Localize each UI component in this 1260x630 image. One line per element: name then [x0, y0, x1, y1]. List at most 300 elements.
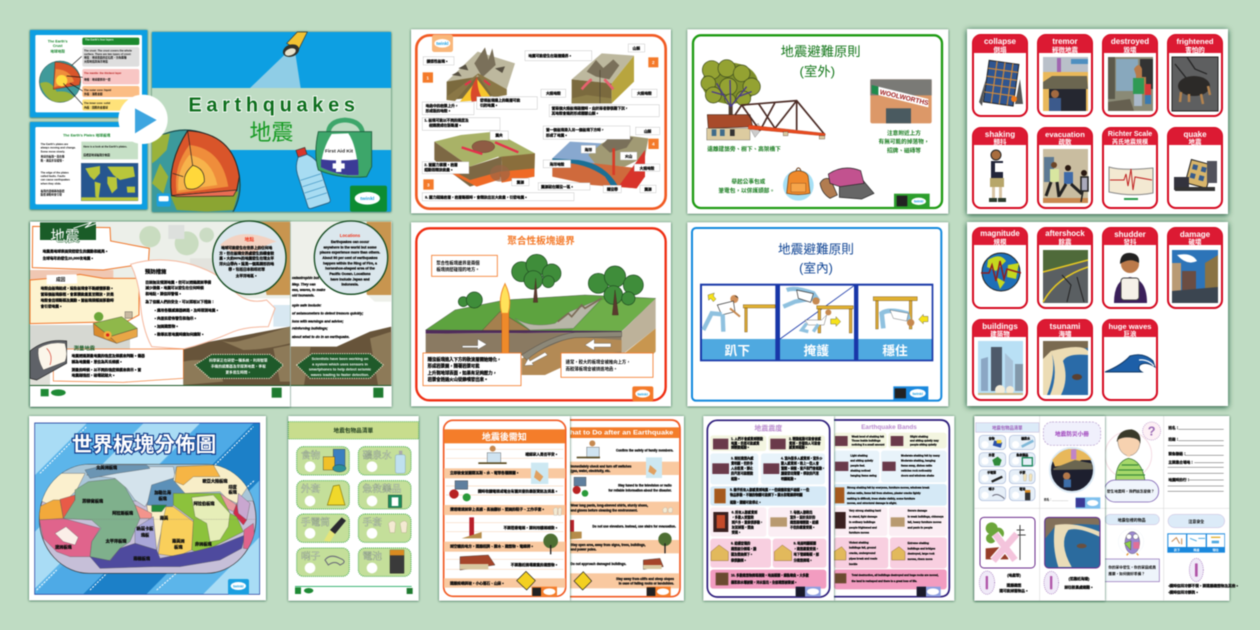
- page: English: moves, rivers move: [908, 557, 933, 561]
- diagram 3: transform fault: [434, 132, 535, 187]
- intensity text: 地下管線斷裂，部: [794, 552, 820, 557]
- title: Chinese: 地震: [249, 120, 293, 145]
- icon: torch: [324, 517, 346, 542]
- preparation text: • 加固建築物。: [155, 324, 179, 329]
- page: English: Weak level of shaking felt: [852, 434, 884, 438]
- list text: 立即檢查並關閉瓦斯、水、電等各種開關。: [450, 470, 519, 475]
- intensity text: 覺到，坐著的人可能會: [789, 440, 821, 445]
- mini panel: indoor rules: [1167, 533, 1225, 553]
- circle: locations: Earthquakes can occur: [331, 240, 370, 244]
- card: Richter scale: 芮氏地震規模: [1112, 138, 1148, 146]
- slide: the Earth's plates: Some move slowly.: [41, 149, 65, 153]
- icon: earth block: [93, 312, 137, 343]
- label boxes: 火山: [625, 154, 633, 159]
- diagram 1: divergent boundary: [447, 47, 515, 102]
- page: English: fall, heavy furniture moves: [908, 520, 942, 524]
- cover title: 地震防災小冊: [1055, 430, 1089, 438]
- label boxes: 地震可能發生在碰撞邊界。: [528, 53, 572, 58]
- heading band: 地震包物品清單: [992, 424, 1023, 431]
- label boxes: 大陸地殼: [640, 165, 655, 170]
- card: buildings: buildings: [982, 322, 1018, 331]
- map labels: 板塊: [159, 495, 168, 501]
- map labels: 塊板: [141, 532, 150, 538]
- intensity text: 感覺到搖動。: [789, 445, 808, 450]
- slide: the Earth's plates: [30, 122, 147, 209]
- map labels: 加勒比海: [154, 489, 172, 495]
- page: English: Slight shaking: [910, 434, 929, 438]
- label boxes: 發現板塊邊上的斷層可能: [480, 98, 521, 103]
- slide: the Earth's crust: The inner core: solid: [84, 101, 111, 105]
- preparation text: • 向居民發佈警告和指示。: [155, 316, 197, 321]
- page: English: Extreme shaking: [908, 541, 929, 545]
- intensity text: 建築部分倒塌，牆: [731, 546, 757, 551]
- page: English: May. They can: [292, 283, 316, 287]
- map labels: 板塊: [174, 544, 183, 550]
- icon: world map: [81, 163, 138, 201]
- intensity text: 的汽車可能輕微: [731, 470, 754, 475]
- callout: subduction: 通常，較大的板塊會被推向上方，: [566, 359, 631, 366]
- circle: locations: have include Japan and: [330, 277, 370, 281]
- page: English: smartphones to help detect seismic: [309, 368, 371, 372]
- circle: locations: [314, 221, 388, 294]
- page: English: for reliable information about the disaster.: [609, 489, 672, 493]
- label boxes: 形成了地震。: [546, 133, 568, 138]
- slide: the Earth's crust: 地球地殼: [50, 48, 65, 53]
- logo: twinkl: twinkl: [360, 196, 375, 202]
- page: English: of seismometers to detect tremors quickly;: [292, 311, 363, 315]
- card: collapse: collapse: [984, 37, 1017, 46]
- seismograph block: 地震越強烈，破壞就越大。: [72, 372, 116, 377]
- list text: 確認家人是否平安。: [525, 452, 558, 457]
- label boxes: 2. 當壓力累積，岩層: [424, 162, 458, 167]
- label boxes: 海洋地殼: [550, 161, 565, 166]
- preparation text: 減少損傷，地震可以發生在任何時候: [145, 285, 204, 290]
- intensity text: [730, 436, 825, 584]
- panel: earthquake prevention booklet: [974, 416, 1239, 601]
- causes block: 當兩個板塊摩擦，會累積能量直至釋放，於是: [41, 292, 114, 297]
- page: English: dishes rattle, items fall from shelves, plaster cracks lightly: [847, 491, 921, 495]
- slide: the Earth's plates: Here is a look at the Earth's plates.: [83, 144, 127, 148]
- number tags: 2: [652, 60, 655, 65]
- callout: magma: 形成岩漿團，隨著岩漿可能: [428, 363, 480, 370]
- icons: intensity: [711, 439, 792, 585]
- slide: the Earth's crust: surface. There are two types of crust:: [84, 52, 131, 56]
- card: Richter scale: Richter Scale: [1108, 131, 1152, 138]
- hexagon note: 科學家正在研發一種系統，利用智慧: [209, 358, 268, 363]
- logo: footer: [796, 587, 821, 597]
- page: English: doors and windows shake: [901, 474, 935, 478]
- mini panel: indoor rules: 穩住: [1213, 547, 1219, 552]
- hexagon note: [195, 354, 283, 378]
- form labels: 主要集合場地：: [1168, 460, 1194, 465]
- intensity text: 搖動。: [731, 476, 740, 481]
- page: left sheet: [974, 416, 1105, 601]
- page: English: Do not use elevators. Instead, use stairs for evacuation.: [592, 525, 676, 529]
- page: English: reinforcing buildings;: [292, 327, 328, 331]
- page: English: people frightened and: [849, 526, 877, 530]
- intensity text: 搖動，擺鐘可能停止。: [730, 499, 762, 504]
- checklist: 急救藥品: [1016, 452, 1028, 457]
- slide: the Earth's crust: 大陸地殼與海洋地殼: [84, 59, 108, 63]
- heading pill: [1105, 514, 1159, 525]
- card: Richter scale: [1103, 128, 1157, 208]
- page: English: catastrophic but: [292, 276, 320, 280]
- callout: magma: 上升到地球表面，如果有足夠壓力，: [428, 369, 497, 376]
- heading band: [976, 423, 1039, 432]
- list text: [450, 452, 558, 586]
- mini panel: indoor rules: 趴下: [1174, 547, 1180, 552]
- diagram 2: continental collision: [572, 53, 634, 103]
- step: cover: 掩護: [804, 343, 829, 358]
- caption: right: 前往較高處避難。: [1064, 585, 1094, 590]
- slide: the Earth's plates: when they slide.: [41, 181, 61, 185]
- page: English: in weak buildings, chimneys: [908, 514, 944, 518]
- slide: the Earth's plates: The Earth's Plates 地球板塊: [63, 132, 111, 137]
- circle: locations: happen within the Ring of Fire, a: [323, 261, 377, 265]
- icon: person taking cover: [820, 168, 874, 199]
- photo: shop sign: WOOLWORTHS: [879, 89, 930, 107]
- header block: 地震: [50, 228, 80, 245]
- subtitle: (室外): [800, 63, 835, 79]
- label boxes: 山脈: [633, 46, 640, 51]
- icon: magma plume: [500, 284, 510, 355]
- intensity text: 4. 室內很多人感覺到，室外少: [781, 455, 823, 460]
- safety note: [1168, 583, 1239, 595]
- callout: boundary definition: 板塊擠壓碰撞的地方。: [436, 266, 480, 273]
- list text: 不要靠近損壞嚴重的建築物。: [511, 562, 558, 567]
- logo: twinkl: twinkl: [233, 585, 244, 589]
- card: aftershock: 餘震: [1058, 237, 1072, 246]
- heading pill: drop cover hold: 注意安全: [1188, 518, 1204, 524]
- label boxes: 海洋: [585, 147, 592, 152]
- background: hillside town: [30, 222, 290, 385]
- page: right sheet: [1104, 416, 1239, 601]
- label boxes: 大陸地殼: [546, 91, 561, 96]
- page: English: in case of falling rocks or landslides.: [619, 582, 674, 586]
- slide: the Earth's plates: 這裡是地球板塊分佈圖: [83, 153, 110, 157]
- label boxes: 其地殼會隆起形成褶皺山脈。: [552, 110, 599, 115]
- page: English: Severe damage: [908, 509, 928, 513]
- circle: locations: places experience more than others.: [320, 251, 380, 255]
- icon: damaged house: [707, 115, 761, 140]
- hexagon note: 手機的感應器及早探測地震，爭取: [211, 364, 266, 369]
- seismograph block: 地震透過測量地震的強度及規模來判斷。儀器: [72, 353, 145, 358]
- page: English: [834, 416, 954, 601]
- preparation text: • 應用各種感應器網路，及時探測地震。: [155, 308, 219, 313]
- card: tsunami: 海嘯: [1058, 329, 1072, 338]
- step: drop: [702, 286, 775, 360]
- map labels: 歐亞大陸板塊: [203, 478, 228, 484]
- logo: twinkl: [894, 194, 930, 208]
- step: cover: [780, 286, 854, 360]
- list text: 清理環境前穿上長褲、長袖襯衫、堅固的鞋子、工作手套。: [450, 507, 545, 512]
- heading pill: 地震包裡的物品: [1118, 516, 1146, 522]
- map labels: 納茲卡板: [137, 525, 154, 531]
- icon: first aid bag: [388, 495, 402, 508]
- poster: world plates: [29, 416, 266, 600]
- causes block: 地殼由板塊組成，這些板塊會不斷緩慢移動。: [41, 286, 114, 291]
- map labels: 南美洲: [172, 538, 185, 544]
- icon: owl: [1118, 529, 1144, 555]
- callout: boundary definition: 聚合性板塊邊界是兩個: [436, 259, 480, 266]
- page: English: eas, waves, to make: [292, 288, 325, 292]
- intensity text: 5. 幾乎所有人都感覺到地震，一些碗盤和窗戶破裂，一些: [730, 487, 810, 492]
- page: English: pipes break and roads: [849, 556, 878, 560]
- card: damage: 破壞: [1188, 237, 1202, 246]
- slide: the Earth's crust: The Earth's: [48, 39, 68, 43]
- caption: falling objects: 有無可能的掉落物，: [879, 138, 929, 146]
- intensity text: ，多數人受驚跑: [732, 514, 755, 519]
- panel: plate boundaries diagrams: [411, 29, 671, 213]
- map labels: 南極板塊: [133, 555, 151, 561]
- icon: bridge: [735, 101, 825, 139]
- logo: footer: [373, 388, 383, 398]
- step: drop: 趴下: [725, 344, 750, 358]
- header block: [32, 222, 149, 270]
- page: English: ions with warnings and advice;: [292, 319, 344, 323]
- cover title: [1043, 422, 1101, 445]
- page: English: Violent shaking: [849, 540, 869, 544]
- checklist items: 電池: [363, 551, 382, 563]
- card: collapse: 倒塌: [994, 45, 1007, 54]
- card: tsunami: tsunami: [1050, 322, 1080, 331]
- panel: vocabulary cards part 1: [967, 29, 1228, 214]
- card: aftershock: [1038, 228, 1092, 308]
- page: English: to stand, light damage: [849, 514, 878, 518]
- earth band: [183, 327, 290, 385]
- preparation text: 為了保護人們的安全，可以採取以下措施：: [145, 299, 215, 304]
- intensity text: 明顯搖動。: [781, 476, 797, 481]
- slide: the Earth's crust: The outer core: liquid: [84, 88, 112, 92]
- callout: subduction: [561, 353, 653, 377]
- intensity text: ，建築嚴重受損，: [794, 546, 819, 551]
- checklist: 外套: [989, 452, 995, 457]
- card: magnitude: 規模: [994, 237, 1007, 246]
- callout: magma: 隱沒板塊進入下方的軟流層開始熔化，: [428, 356, 501, 363]
- map labels: [55, 464, 238, 561]
- slide: the Earth's crust: 地幔：地球最厚的一層: [84, 78, 111, 82]
- intensity text: 6. 所有人都感覺到: [732, 509, 757, 514]
- card: huge waves: [1103, 320, 1157, 400]
- circle: locations: Indonesia.: [341, 283, 359, 287]
- speech bubble: 發生地震時，我們該怎麼做？: [1107, 488, 1154, 493]
- panel: outdoor earthquake safety: [687, 29, 948, 214]
- icon: thinking child: [1105, 422, 1161, 481]
- page: English: Confirm the safety of family members.: [616, 449, 673, 453]
- image: tsunami: [1045, 517, 1100, 568]
- page: English: Wear long pants, long-sleeved shirts, sturdy shoes,: [571, 504, 648, 508]
- title: Earthquakes: [188, 95, 355, 117]
- intensity text: 物品移動，不穩的物體可能倒下。樹木和電線桿明顯: [730, 492, 803, 497]
- icon: gloves: [388, 521, 407, 533]
- card: shaking: 顫抖: [994, 137, 1007, 146]
- map labels: 板塊: [229, 488, 238, 494]
- checklist: 手電筒: [987, 469, 996, 474]
- circle: earthquake locations: 洋火山帶內。這是一個馬蹄形的地: [219, 261, 274, 266]
- map labels: 北美洲板塊: [96, 464, 118, 470]
- icon: earth layers: [39, 56, 83, 105]
- intensity text: 建築損壞輕微，結構: [790, 519, 819, 524]
- icon: food tins: [323, 449, 346, 472]
- title: 地震避難原則: [778, 243, 854, 257]
- intensity text: 2. 輕微搖動可能會被感: [789, 436, 822, 441]
- page: English: vehicles rock noticeably: [901, 469, 932, 473]
- intensity text: 灰泥掉落，煙囪: [732, 524, 754, 529]
- checklist items: 手電筒: [301, 517, 330, 529]
- page: English: items sway, dishes rattle: [901, 464, 933, 468]
- checklist: 電池: [1019, 486, 1025, 491]
- panel strip frame: [700, 284, 933, 361]
- page: English: buildings and bridges: [908, 546, 936, 550]
- title: 地震震度: [754, 424, 782, 433]
- intensity text: 3. 附近建築內感: [731, 455, 754, 460]
- card: destroyed: 毀壞: [1124, 45, 1137, 54]
- card: shaking: shaking: [985, 130, 1015, 139]
- caption: left: [999, 573, 1029, 593]
- icon: tree: [701, 60, 760, 117]
- slide: the Earth's plates: The Earth's plates are: [41, 142, 69, 146]
- step: hold on: 穩住: [882, 343, 908, 358]
- page: English: cracks, underground: [849, 551, 876, 555]
- list text: 隨時收聽電視或電台有關災害的最新資訊及消息。: [478, 488, 558, 493]
- label boxes: 當兩個大陸板塊碰撞時，由於兩者都很難下沉，: [552, 105, 628, 110]
- page: English: and sitting quietly: [850, 459, 874, 463]
- page: English: waves leading to faster detection.: [310, 373, 369, 377]
- card: huge waves: huge waves: [1108, 322, 1152, 331]
- label boxes: 當一個板塊滑入另一個板塊下方時，: [546, 127, 604, 132]
- card: magnitude: [973, 228, 1027, 308]
- list text: 到空曠的地方，遠離招牌、樹木、建築物、電線桿。: [450, 543, 534, 548]
- page: Chinese: [703, 416, 834, 601]
- circle: earthquake locations: 太平洋地區。: [236, 273, 258, 278]
- cover footer: [1044, 497, 1100, 509]
- slide: the Earth's plates: always moving and change.: [41, 146, 76, 150]
- intensity text: 分建築倒塌。: [794, 557, 813, 562]
- card: tsunami: [1038, 320, 1092, 400]
- page: English: Moderate shaking, hanging: [901, 459, 936, 463]
- logo: footer: [41, 388, 282, 398]
- intensity text: 不佳的嚴重受損。: [790, 524, 815, 529]
- intensity text: 傢俱翻倒。: [731, 557, 747, 562]
- map labels: 南美: [160, 514, 168, 520]
- title: 聚合性板塊邊界: [507, 235, 575, 247]
- circle: locations: Locations: [340, 233, 361, 238]
- page: English: Do not approach damaged buildings.: [571, 562, 626, 566]
- checklist items: 哨子: [301, 551, 321, 563]
- hexagon note: 更多逃生時間。: [226, 370, 251, 375]
- panel: Earthquakes presentation cover: [28, 28, 393, 214]
- label boxes: 3. 壓力超過岩層，岩層斷裂時，會釋放出巨大能量，引發地震。: [425, 194, 528, 199]
- slide: the Earth's plates: 板塊的邊緣稱為斷層: [41, 189, 65, 193]
- number tags: 1: [426, 75, 429, 80]
- logo: twinkl: twinkl: [436, 41, 448, 46]
- intensity text: 牆壁發出聲響，停放的汽車: [781, 470, 820, 475]
- safety note: •隨時保持冷靜不慌，要遠離建築物及其他。: [1168, 583, 1239, 588]
- panel: vocabulary cards part 2: [967, 222, 1228, 406]
- checklist items: 急救藥品: [363, 483, 401, 495]
- checklist items: 手套: [363, 517, 382, 529]
- page: Chinese: [30, 221, 290, 407]
- step: hold on: [858, 286, 932, 360]
- icon: raincoat: [327, 485, 345, 505]
- logo: badge: [157, 193, 171, 207]
- card: huge waves: 巨浪: [1124, 329, 1137, 338]
- preparation block: [131, 260, 275, 349]
- caption: right: (若靠近海邊): [1069, 576, 1090, 581]
- slide: the Earth's crust: Crust: [53, 44, 63, 48]
- caption: left: 遠離建築: [1007, 583, 1022, 588]
- icons: English page: [834, 436, 905, 583]
- intensity text: 1. 人們不會感覺到輕微: [731, 436, 764, 441]
- page: English: Total destruction, all buildings destroyed and huge rocks are moved,: [852, 573, 939, 577]
- circle: locations: anywhere in the world but some: [323, 245, 377, 249]
- logo: footer: [917, 587, 941, 597]
- speech bubble: [1104, 480, 1159, 502]
- slide: the Earth's plates: The edge of the plates: [41, 170, 69, 174]
- card: destroyed: destroyed: [1111, 37, 1149, 46]
- intensity text: 8. 結構普通的: [731, 540, 750, 545]
- label boxes: 擴張性板塊。: [427, 58, 449, 63]
- label boxes: 形成新的地殼。: [426, 108, 451, 113]
- page: English: moves, and structural damage is slight.: [847, 501, 897, 505]
- card: frightened: [1168, 35, 1222, 116]
- card: aftershock: aftershock: [1045, 229, 1085, 238]
- checklist: [979, 435, 1035, 501]
- panel: what to do after an earthquake: [439, 416, 684, 601]
- card: magnitude: magnitude: [980, 229, 1020, 238]
- logo: twinkl: [432, 35, 453, 52]
- circle: locations: horseshoe-shaped area of the: [325, 267, 375, 271]
- card: collapse: [973, 35, 1027, 116]
- logo: twinkl: [228, 579, 249, 595]
- form labels: [1168, 425, 1194, 482]
- icon: earth cross-section: [151, 128, 242, 212]
- card: damage: damage: [1180, 230, 1211, 239]
- caption: right: [1064, 576, 1094, 590]
- slide: the Earth's crust: [30, 30, 147, 117]
- list text: 不要搭乘電梯，要利用樓梯疏散。: [503, 525, 558, 530]
- circle: earthquake locations: 地球可能發生在世界上的任何地: [221, 245, 273, 250]
- card: frightened: frightened: [1176, 37, 1214, 46]
- label boxes: 地函中的岩漿上升，: [426, 103, 459, 108]
- intensity text: 人未察覺，靜止: [731, 465, 754, 470]
- icons: English list: [570, 440, 673, 590]
- page: English: Earthquake Bands: [861, 424, 917, 431]
- caption: outdoor hazards: 遠離建築旁、樹下、高架橋下: [707, 145, 781, 153]
- preparation text: [145, 267, 219, 337]
- intensity boxes: [710, 435, 826, 589]
- intensity text: 到輕微搖動。: [731, 445, 750, 450]
- panel: indoor earthquake safety: [687, 222, 948, 406]
- page: English: and panic in people: [908, 526, 933, 530]
- map labels: 非洲板塊: [195, 540, 212, 546]
- page: English: Very strong shaking hard: [849, 509, 881, 513]
- cover footer: 姓名：___________: [1044, 498, 1069, 502]
- map labels: 菲律賓板塊: [82, 498, 104, 504]
- map labels: 阿拉伯板塊: [194, 500, 215, 506]
- slide: the Earth's plates: 地球的板塊一直在移: [41, 155, 65, 159]
- slide: the Earth's plates: 動，速度非常緩慢。: [41, 158, 65, 162]
- checklist: 食物: [989, 435, 995, 440]
- subtitle: (室內): [799, 260, 833, 275]
- page: English: [291, 221, 391, 407]
- label boxes: 1. 板塊可能以不同的速度及: [424, 118, 469, 123]
- card: quake: 地震: [1188, 137, 1202, 146]
- panel: world plate map and checklist: [29, 416, 419, 601]
- label boxes: 相遇擠成在新斷層。: [429, 123, 462, 128]
- page: English: noticing it a small amount: [852, 442, 885, 446]
- page: English: walking is difficult, trees shake visibly, some furniture: [847, 496, 916, 500]
